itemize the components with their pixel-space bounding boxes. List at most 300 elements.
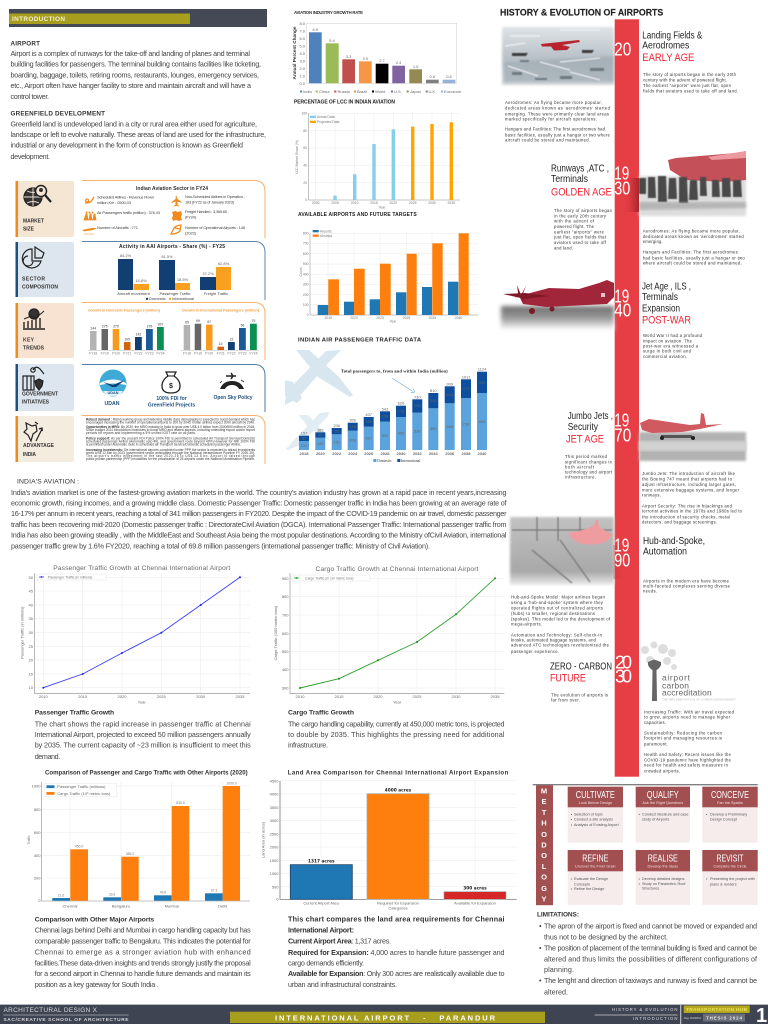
total labels: 1124 (478, 367, 487, 372)
text block: airport: control tower. (10, 92, 49, 101)
era summary: multi-faceted complexes serving diverse (643, 583, 731, 588)
bar chart: LCC market share: 2035 (448, 201, 455, 205)
bar chart: LCC market share: 2010 (351, 201, 359, 205)
text block: india's aviation: economic growth, rising incomes, and a growing middle class. Domestic Passenger Traffic: Domestic passenger traffic in India has been growing at an average rate of (11, 498, 506, 508)
heading: percentage of LCC: PERCENTAGE OF LCC IN INDIAN AVIATION (294, 100, 395, 106)
photo: 1970 jet aircraft (639, 413, 746, 461)
card: advantage india (16, 416, 74, 462)
methodology side label: D (541, 840, 547, 850)
total labels: 543 (382, 406, 389, 411)
icon: freight (172, 211, 182, 221)
text block: greenfield development: Greenfield land is undeveloped land in a city or rural area either used for agriculture, (10, 120, 257, 128)
card: conceive: Fan the Sparks (717, 801, 743, 805)
bar chart: land area comparison: 1000 (270, 871, 279, 876)
year labels: 2028 (381, 451, 390, 456)
bar chart: comparison with other airports (27, 769, 250, 908)
total labels: 182 (317, 427, 324, 432)
card: realise (636, 850, 690, 905)
legend: Cargo Traffic (10³ metric tons) (57, 791, 111, 796)
footer thesis tag: TRANSPORTATION HUB (686, 1007, 748, 1013)
bar chart: comparison with other airports: Traffic (27, 835, 31, 845)
chart: international passengers: 67 (207, 320, 211, 324)
legend: Japan (410, 89, 421, 94)
chart: international passengers: 65 (185, 320, 189, 324)
year (614, 286, 631, 320)
bar chart: aviation growth by region: 3.0 (363, 56, 369, 61)
stat: air passengers: Air Passengers traffic (million) : 376.43 (97, 210, 161, 215)
line chart: cargo traffic growth: 600 (282, 631, 289, 636)
icon: gear pie (22, 247, 44, 268)
icon: plane up (172, 195, 182, 206)
era title: Terminals (551, 174, 588, 185)
card: government initiatives: GOVERNMENT (22, 392, 58, 398)
bar chart: comparison with other airports: 800 (34, 807, 41, 812)
card: refine: • (571, 887, 573, 891)
text block: airport: etc., Airport often have hanger facility to store and maintain aircraft and will have a (10, 81, 251, 90)
bar chart: airports and targets: 2015 (325, 316, 332, 320)
card: refine: REFINE (582, 854, 609, 864)
bar chart: comparison with other airports: 0 (38, 898, 41, 903)
era title: Hub-and-Spoke, (643, 536, 705, 547)
icon: aircraft side (83, 228, 96, 234)
text block: greenfield development: industrial or any development in the form of construction is known as Greenfield (10, 140, 243, 150)
legend: Brazil (357, 89, 367, 94)
bar chart: land area comparison: Available for Expansion (454, 900, 496, 906)
photo: 1990 terminal interior (510, 517, 625, 585)
bar chart: LCC market share: Year (379, 206, 386, 210)
era details: more extensive baggage systems, and longer (642, 487, 740, 492)
era name: JET AGE (566, 433, 604, 445)
bar chart: land area comparison: 4000 (270, 792, 279, 797)
bar chart: comparison with other airports: 1000 (32, 784, 41, 788)
stat: operational airports: (2023) (185, 230, 197, 236)
era title: Terminals (642, 292, 678, 303)
era title: ZERO - CARBON (550, 661, 612, 672)
era summary (553, 208, 613, 251)
bar chart: comparison with other airports: 600 (34, 830, 41, 835)
era details: Hangars and Facilities: The first aerodromes (643, 250, 738, 255)
panel: indian aviation sector (82, 180, 265, 238)
bar chart: airports and targets: 2023 (376, 316, 384, 320)
line chart: passenger traffic growth: 45 (29, 588, 34, 594)
text block: passenger traffic growth: demand. (35, 752, 60, 761)
text block: limitations: planning. (544, 965, 574, 974)
bar chart: comparison with other airports: 1000.0 (226, 782, 237, 786)
text block: land area explanation: International Airport: (288, 926, 354, 934)
bar chart: aviation growth by region: 4.0 (299, 51, 306, 56)
methodology side label: Y (541, 895, 547, 904)
heading: available airports: AVAILABLE AIRPORTS AND FUTURE TARGETS (298, 212, 417, 218)
legend: U.K. (428, 89, 436, 94)
text block: land area explanation: Available for Expansion: Only 300 acres are realistically available due to (288, 969, 504, 978)
heading: history and evolution: HISTORY & EVOLUTION OF AIRPORTS (500, 7, 663, 17)
chart: indian air passenger traffic stacked bars (285, 350, 487, 463)
text block: limitations (537, 912, 757, 996)
era title (643, 536, 705, 557)
era 1970 (565, 410, 743, 524)
era details: paramount. (644, 741, 668, 746)
era summary: This period marked (565, 454, 608, 459)
legend (292, 575, 370, 581)
bar chart: airports and targets: 2025 (403, 316, 410, 320)
era summary: both aircraft (565, 464, 595, 469)
text block: comparison with other major airports: Chennai to emerge as a stronger aviation hub with enhanced (35, 948, 251, 956)
legend (310, 115, 340, 124)
text block: india's aviation: traffic has been recovering mid-2020 (Domestic passenger traffic : DirectorateCivil Aviation (DGCA). International Passenger Traffic: International passenger traffic from (11, 520, 507, 529)
era title: Automation (643, 546, 687, 557)
bar chart: comparison with other airports: 450.0 (75, 844, 83, 848)
bar chart: airports and targets: 800 (303, 232, 309, 236)
card: revisit (702, 850, 758, 905)
chart: domestic passengers: FY20 (112, 352, 120, 356)
stat: freight handled (185, 209, 228, 220)
stat: revenue flown (97, 194, 154, 205)
total labels: 300 (349, 418, 357, 423)
introduction header bar (9, 9, 267, 27)
text block: passenger traffic growth (35, 710, 251, 761)
stat: operational airports (185, 225, 246, 236)
card: cultivate: • (571, 823, 573, 827)
chart: international passengers: 69 (196, 319, 200, 323)
chart: domestic passengers: FY21 (123, 352, 131, 356)
chart: international passengers: 70 (252, 319, 255, 323)
era title: Aerodromes (642, 40, 689, 51)
bar chart: airports and targets: 700 (303, 242, 309, 246)
bar category labels: Passenger Traffic (159, 291, 191, 296)
card: conceive: • (706, 812, 708, 816)
bar chart: LCC market share: 2030 (428, 201, 436, 205)
heading: indian air passenger traffic: INDIAN AIR PASSENGER TRAFFIC DATA (298, 337, 422, 343)
legend: U.S. (394, 89, 402, 94)
icon: passengers (84, 212, 96, 220)
era details (643, 229, 745, 266)
footer thesis tag: THESIS 2024 (706, 1016, 742, 1021)
line chart: passenger traffic growth: 30 (29, 630, 34, 635)
panel: advantage india text: encouraged increasing the number of operational airports to 200 by 2040. Indian airlines expect 2000 aircraft by 2040. (86, 420, 255, 424)
legend: Passenger Traffic (millions) (57, 784, 106, 789)
bar value labels: 81.5% (161, 254, 173, 259)
era summary: surge in both civil and (643, 349, 692, 354)
text block: land area explanation: cargo demands efficiently. (288, 958, 364, 967)
bar chart: comparison with other airports: Chennai (63, 904, 78, 908)
international value labels: 138 (365, 419, 373, 424)
era details: capacities. (644, 720, 666, 725)
card: revisit: Presenting the project with (710, 877, 755, 881)
total labels: 1011 (462, 374, 471, 379)
text block: airport: AIRPORT (10, 40, 40, 48)
icon: money bag (162, 372, 180, 393)
bar chart: land area comparison: Required for Expansion (377, 900, 419, 906)
text block: land area explanation: Required for Expansion: 4,000 acres to handle future passenger and (288, 948, 504, 957)
domestic value labels: 665 (446, 424, 454, 429)
text block: limitations: The apron of the airport is fixed and cannot be moved or expanded and (544, 922, 757, 930)
card: cultivate: CULTIVATE (576, 790, 615, 801)
panel: advantage india text: Robust demand : Rising working group and widening middle class demography is expected to boost demand which has (86, 417, 255, 421)
bar chart: land area comparison: Categories (388, 906, 408, 910)
domestic value labels: 122 (301, 443, 308, 448)
text block: greenfield development: GREENFIELD DEVELOPMENT (10, 111, 105, 118)
legend (146, 296, 194, 301)
card: revisit: plans & renders (710, 882, 737, 886)
panel: advantage india text: Policy support: As per the present FDI Policy 100% FDI is permitted in scheduled Air Transport Service/Domestic (86, 436, 255, 440)
methodology side label: O (541, 873, 547, 882)
bar chart: comparison with other airports: 21.6 (58, 894, 64, 898)
line chart: cargo traffic growth: Cargo Traffic ('000 metric tons) (273, 605, 278, 660)
bar chart: LCC market share: 80 (303, 129, 307, 133)
panel: passenger growth charts (82, 302, 265, 360)
card: key trends: KEY (23, 338, 35, 344)
text block: india's aviation: India has also been growing steadily , with the MiddleEast and Southeast Asia being the most popular destinations. According to the Ministry ofCivil Aviation, international (11, 530, 507, 540)
chart: international passengers: FY23 (238, 352, 247, 356)
bar chart: land area comparison: 4000 acres (385, 788, 412, 794)
line chart: cargo traffic growth: 900 (282, 576, 289, 581)
line chart: passenger traffic growth: 2025 (157, 694, 167, 699)
domestic value labels: 536 (414, 428, 421, 434)
card: refine: Refine the Design (574, 887, 604, 891)
bar category labels: Freight Traffic (204, 291, 228, 296)
era summary: The story of airports began in the early 20th (643, 72, 737, 77)
era details: operated flights out of centralized airports (511, 605, 603, 610)
text block: greenfield development (10, 111, 266, 161)
methodology side label: O (541, 830, 547, 839)
era title (642, 30, 703, 51)
text block: comparison with other major airports: Comparison with Other Major Airports (35, 916, 154, 924)
era title (642, 281, 691, 314)
domestic value labels: 739 (463, 422, 470, 426)
text block: comparison with other major airports: for a second airport in Chennai to handle future demands and maintain its (35, 969, 251, 978)
line chart: cargo traffic growth (273, 566, 504, 704)
text block: greenfield development: landscape or left to evolve naturally. These areas of land are used for the infrastructure, (10, 130, 266, 139)
bar chart: land area comparison: 300 acres (463, 886, 487, 892)
bar chart: airports and targets: 0 (307, 313, 309, 317)
card: refine: Evaluate the Design (574, 877, 608, 881)
bar chart: airports and targets: 2040 (455, 316, 462, 320)
bar chart: land area comparison: Current Airport Area (303, 900, 339, 906)
bars: freight traffic (200, 267, 231, 290)
legend (44, 783, 117, 797)
bar chart: LCC market share: 2020 (390, 201, 397, 205)
text block: airport: boarding, baggage, toilets, retiring rooms, restaurants, lounges, emergency services, (10, 70, 259, 80)
bar chart: land area comparison: 0 (276, 896, 279, 902)
text block: passenger traffic growth: by 2035. The current capacity of ~23 million is insufficient to meet this (35, 741, 251, 750)
methodology side label: T (542, 808, 547, 817)
bar chart: airports and targets: 2035 (429, 316, 436, 320)
stat: revenue flown: million Km : 0500.03 (97, 200, 132, 205)
year: 20 (615, 652, 632, 672)
stat: non-scheduled airlines: Non-Scheduled Airlines in Operation - (185, 194, 246, 199)
card: cultivate: Conduct a site analysis (574, 818, 613, 822)
bar value labels: 37.2% (202, 271, 214, 276)
icon: policy and location (23, 367, 44, 390)
chart: domestic passengers: Growth in Domestic Passengers (million) (88, 308, 161, 312)
bar chart: LCC market share (295, 112, 460, 210)
bar value labels: 18.5% (177, 277, 189, 282)
year: 20 (614, 40, 631, 60)
year: 90 (614, 550, 630, 570)
footer thesis tag: Reg. 40190511 (684, 1016, 701, 1020)
text block: india's aviation: India's aviation market is one of the fastest-growing aviation markets in the world. The country's aviation industry has grown at a rapid pace in recent years,increasing (11, 488, 507, 497)
era summary: century with the advent of powered flight. (643, 78, 727, 82)
era summary (565, 454, 613, 480)
text block: comparison with other major airports (35, 916, 251, 989)
era summary: fields that aviators used to take off and land. (643, 88, 738, 94)
methodology side label: G (541, 884, 547, 893)
icon: operational airports (171, 225, 181, 234)
text block: limitations: thus not to be designed by the architect. (544, 932, 668, 942)
bar chart: aviation growth by region: 8.0 (299, 21, 306, 26)
line chart: passenger traffic growth: 35 (29, 616, 34, 621)
era details: mega-airports. (511, 622, 542, 627)
logo: airport carbon accreditation: airport (662, 673, 691, 683)
card: advantage india: ADVANTAGE (23, 443, 55, 449)
year labels (300, 451, 487, 456)
year (614, 164, 630, 198)
card: sector composition: SECTOR (22, 277, 45, 283)
card: refine: Concepts (574, 882, 590, 886)
card: refine: Uncover the Finer Grain (575, 864, 616, 868)
chart: international passengers: FY19 (194, 352, 202, 356)
icon: globe with magnifier (24, 186, 51, 206)
chart: domestic passengers: 244 (90, 326, 96, 330)
legend: China (319, 89, 330, 94)
panel: advantage india text: The airport's traffic investment in the last 2020-25 to US$ 12.5 bn. Airport is raised through (86, 454, 255, 458)
methodology side label: L (542, 862, 547, 871)
era details (511, 594, 611, 654)
era 1990 (511, 536, 731, 654)
line chart: passenger traffic growth: 15 (29, 672, 34, 676)
chart: domestic passengers: FY22 (134, 352, 143, 356)
era details: detectors, and baggage screenings. (642, 519, 717, 524)
bar value labels (120, 253, 230, 283)
chart: domestic passengers: FY19 (101, 352, 109, 356)
footer sheet sections (595, 1007, 678, 1021)
bar chart: airports and targets: Year (390, 320, 397, 324)
era details: the introduction of security checks, metal (642, 514, 730, 519)
era details: Sustainability: Reducing the carbon (644, 731, 723, 736)
card: qualify: • (638, 812, 640, 816)
label: FDI (148, 396, 195, 408)
era summary: with the advent of (554, 219, 595, 224)
logo: airport carbon accreditation (641, 642, 736, 702)
era title: Expansion (642, 303, 680, 314)
card: sector composition: COMPOSITION (22, 285, 58, 291)
era summary: Airports in the modern era have become (643, 578, 730, 583)
chart: international passengers: Growth in International Passengers (million) (182, 308, 260, 312)
line chart: cargo traffic growth: 2020 (374, 694, 383, 699)
legend: Domestic (377, 459, 392, 463)
era summary: post-war era witnessed a (643, 343, 699, 348)
era details: the Boeing 747 meant that airports had to (642, 476, 733, 481)
line chart: passenger traffic growth: Passenger Traffic Growth at Chennai International Airport (53, 565, 230, 572)
text block: cargo traffic growth: The cargo handling capability, currently at 450,000 metric tons, is projected (288, 719, 504, 728)
card: conceive: CONCEIVE (711, 790, 749, 801)
era summary: impact on aviation. The (643, 338, 693, 343)
card: realise: Develop detailed designs (642, 877, 685, 881)
card: revisit: Complete the Circle (713, 864, 747, 868)
line chart: cargo traffic growth: 400 (282, 667, 289, 672)
footer left: course: SAC/CREATIVE SCHOOL OF ARCHITECTURE (4, 1017, 129, 1023)
text block: comparison with other major airports: facilities.These data-driven insights and trends strongly justify the proposal (35, 958, 251, 967)
text block: passenger traffic growth: Passenger Traffic Growth (35, 710, 114, 717)
bar chart: airports and targets: Count (299, 267, 303, 277)
card: market size: SIZE (23, 226, 35, 232)
label: FDI: 100% FDI for (156, 396, 187, 402)
era summary: significant changes in (565, 459, 613, 464)
legend: Airstrips (320, 234, 333, 238)
era summary: technology and airport (565, 470, 613, 475)
total labels: 626 (398, 401, 405, 406)
bar chart: LCC market share: 2015 (370, 201, 378, 205)
year: 70 (614, 426, 631, 446)
panel: advantage india text (82, 416, 265, 464)
era name: POST-WAR (642, 314, 691, 326)
line chart: cargo traffic growth: 500 (282, 649, 289, 654)
chart: domestic passengers: 275 (102, 324, 108, 328)
era details: emerging. These were primarily clear land areas (505, 111, 609, 116)
line chart: cargo traffic growth: 2015 (335, 694, 344, 699)
line chart: cargo traffic growth: 2010 (296, 694, 305, 699)
chart: domestic passengers: 275 (113, 324, 119, 328)
card: market size (16, 181, 74, 237)
label: open sky policy: Open Sky Policy (214, 395, 253, 401)
text block: limitations: LIMITATIONS: (537, 912, 579, 918)
line chart: passenger traffic growth: 2010 (39, 694, 49, 699)
icon: money bag: $ (169, 383, 173, 390)
card: market size: MARKET (23, 219, 44, 225)
line chart: passenger traffic growth: 20 (29, 658, 34, 662)
year labels: 2030 (397, 451, 406, 456)
bars: passenger traffic (159, 260, 190, 290)
era details: advanced ATC technologies revolutionized the (511, 643, 610, 648)
bar chart: aviation growth by region: 3.3 (346, 54, 352, 59)
footer title banner (230, 1012, 545, 1023)
era title: Runways ,ATC , (551, 164, 609, 175)
bar chart: airports and targets: 300 (303, 282, 309, 286)
era summary (643, 72, 738, 94)
legend (313, 230, 333, 238)
international value labels: 220 (430, 398, 437, 403)
year: 19 (614, 286, 629, 306)
legend: Airports (320, 230, 332, 234)
panel: methodology (533, 785, 758, 905)
line chart: cargo traffic growth: Year (393, 700, 402, 704)
line chart: passenger traffic growth: 50 (29, 575, 34, 580)
bar chart: aviation growth by region: 2.7 (379, 58, 386, 63)
card: realise: Develop the Ideas (647, 864, 678, 868)
bar value labels: 62.8% (218, 261, 230, 266)
line chart: cargo traffic growth: 700 (282, 612, 289, 618)
text block: passenger traffic growth: The chart shows the rapid increase in passenger traffic at Chennai (35, 719, 251, 728)
card: qualify: Conduct literature and case (642, 812, 688, 816)
international value labels: 39 (318, 432, 323, 437)
text block: land area explanation: urban and infrastructural constraints. (288, 980, 397, 989)
era details: had basic facilities, usually just a hangar or two (643, 255, 745, 260)
era summary: commercial aviation. (643, 354, 687, 359)
introduction header bar: INTRODUCTION (12, 16, 65, 23)
card: conceive: Design Concept (710, 818, 738, 822)
era details: Jumbo Jets: The introduction of aircraft like (642, 471, 736, 476)
card: conceive: Develop a Preliminary (710, 812, 747, 816)
era title (568, 411, 613, 433)
bar chart: land area comparison: 1500 (270, 858, 279, 863)
card: realise: • (638, 882, 640, 886)
bar category labels (117, 291, 228, 296)
stat: freight handled: (FY24) (185, 214, 197, 220)
chart: international passengers: FY24 (249, 352, 258, 356)
methodology side label: H (541, 818, 547, 828)
watermark: large plane (285, 350, 353, 405)
stat: non-scheduled airlines (185, 194, 246, 204)
